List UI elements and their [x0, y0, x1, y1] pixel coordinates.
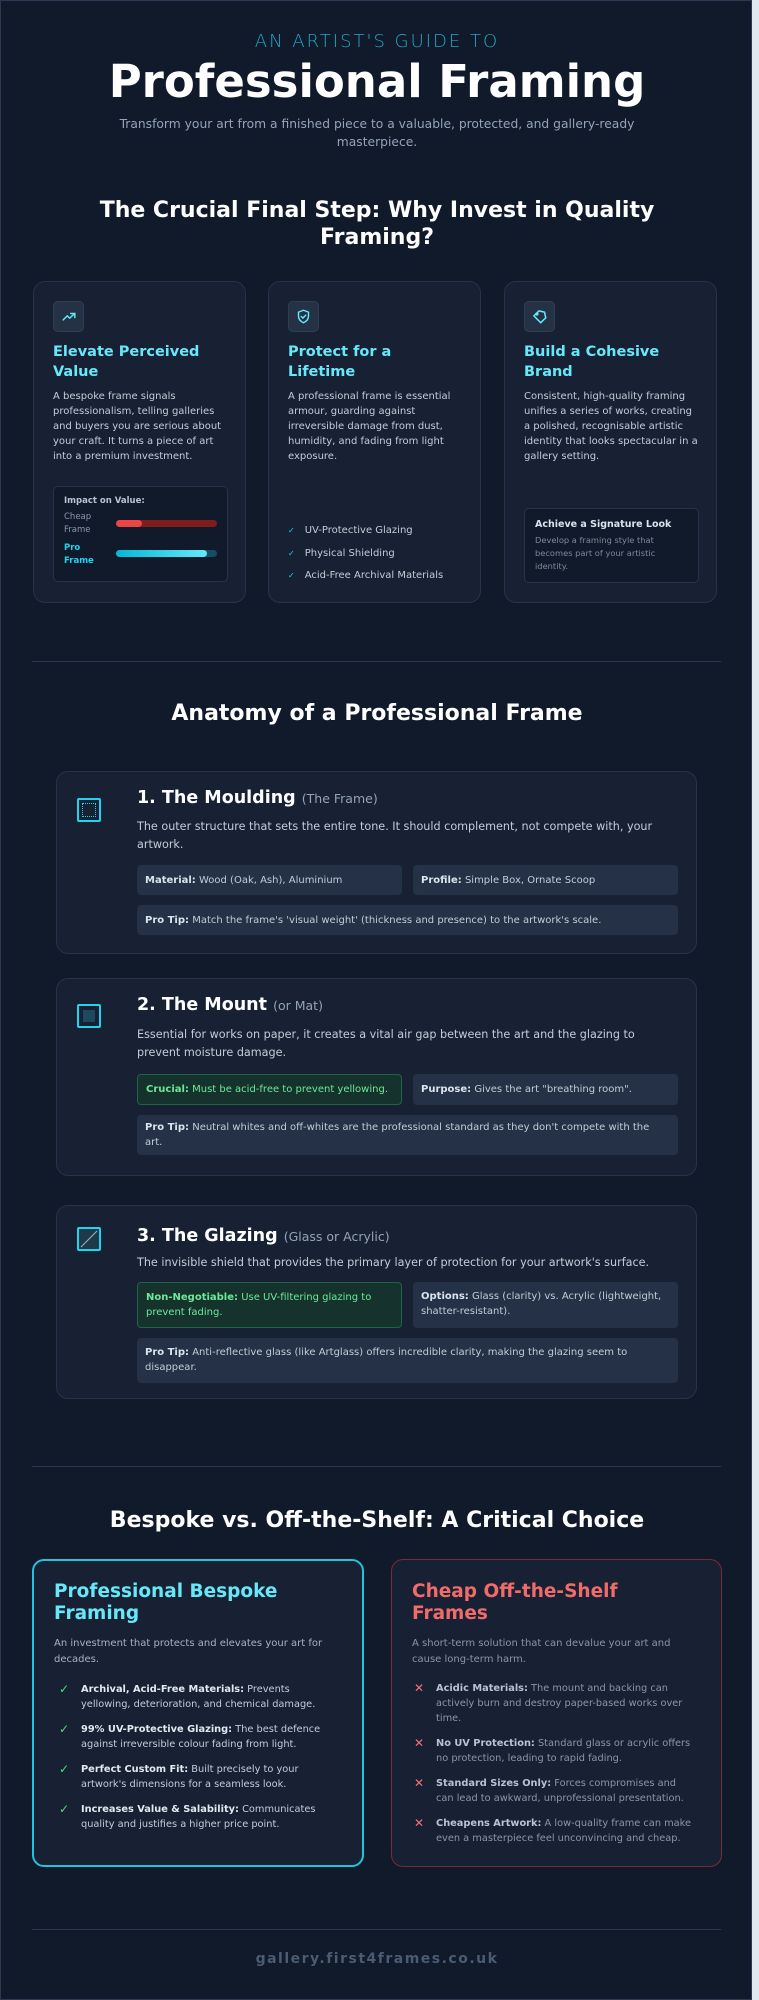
- heading: 3. The Glazing (Glass or Acrylic): [137, 1226, 390, 1246]
- list: drawbacks: ✕: [414, 1736, 424, 1750]
- card heading: Lifetime: [288, 364, 355, 380]
- pill: purpose: Gives the art "breathing room".: [474, 1084, 632, 1095]
- heading: Professional Bespoke: [54, 1581, 277, 1602]
- list: drawbacks: even a masterpiece feel unconvincing and cheap.: [436, 1833, 681, 1844]
- pill: profile: Simple Box, Ornate Scoop: [465, 874, 595, 886]
- card text: your craft. It turns a piece of art: [53, 436, 213, 447]
- list: drawbacks: ✕: [414, 1816, 424, 1830]
- pill: options: [413, 1282, 678, 1328]
- bar chart: impact on value: Impact on Value:: [64, 496, 145, 506]
- card text: [53, 391, 221, 462]
- pill: profile: Profile:: [421, 874, 462, 886]
- intro text: cause long-term harm.: [412, 1654, 526, 1665]
- pill: crucial: Must be acid-free to prevent yellowing.: [192, 1084, 388, 1095]
- list: benefits: artwork's dimensions for a seamless look.: [81, 1779, 286, 1790]
- subtitle: [120, 117, 634, 149]
- text: The invisible shield that provides the primary layer of protection for your artwork's surface.: [137, 1256, 649, 1269]
- heading: bespoke vs off-the-shelf: Bespoke vs. Off-the-Shelf: A Critical Choice: [110, 1508, 644, 1533]
- list: benefits: ✓: [59, 1802, 69, 1816]
- subtitle: Transform your art from a finished piece to a valuable, protected, and gallery-ready: [120, 117, 634, 131]
- card text: identity that looks spectacular in a: [524, 436, 698, 447]
- icon: mount: [77, 1004, 101, 1028]
- heading: Framing: [54, 1603, 139, 1624]
- bar chart: impact on value: [53, 486, 228, 582]
- pill: pro tip: [137, 1338, 678, 1383]
- list: benefits: ✓: [59, 1722, 69, 1736]
- heading: why invest: [100, 198, 654, 250]
- heading: 2. The Mount (or Mat): [137, 995, 323, 1015]
- panel: protect for a lifetime: [268, 281, 481, 603]
- panel: glazing: [56, 1205, 697, 1399]
- pill: non-negotiable: [137, 1282, 402, 1328]
- panel: mount: [56, 978, 697, 1176]
- card heading: Protect for a: [288, 344, 391, 360]
- heading: 1. The Moulding (The Frame): [137, 788, 378, 808]
- card text: [288, 391, 450, 462]
- list: benefits: Perfect Custom Fit: Built precisely to your: [81, 1764, 299, 1775]
- pill: non-negotiable: Non-Negotiable: Use UV-filtering glazing to prevent fading.: [146, 1292, 371, 1318]
- icon: shield: [288, 301, 319, 332]
- card text: [524, 391, 698, 462]
- callout: signature look: [524, 508, 699, 583]
- card heading: [53, 344, 199, 380]
- pill: pro tip: [137, 905, 678, 935]
- callout: signature look: becomes part of your artistic: [535, 548, 655, 558]
- callout: signature look: identity.: [535, 561, 568, 571]
- list: benefits: 99% UV-Protective Glazing: The best defence: [81, 1724, 320, 1735]
- list: benefits: ✓: [59, 1682, 69, 1696]
- list: benefits: against irreversible colour fading from light.: [81, 1739, 297, 1750]
- text: The outer structure that sets the entire tone. It should complement, not compete with, your: [137, 820, 652, 833]
- pill: purpose: [413, 1074, 678, 1105]
- list: drawbacks: Acidic Materials: The mount and backing can: [436, 1683, 668, 1694]
- pill: material: Material:: [145, 874, 196, 886]
- pill: crucial: [137, 1074, 402, 1105]
- checklist: ✓ Physical Shielding: [288, 548, 395, 558]
- heading: why invest: The Crucial Final Step: Why Invest in Quality: [100, 198, 654, 223]
- pill: pro tip: art.: [145, 1137, 162, 1148]
- list: benefits: quality and justifies a higher price point.: [81, 1819, 279, 1830]
- card text: into a premium investment.: [53, 451, 192, 462]
- heading: Cheap Off-the-Shelf: [412, 1581, 618, 1602]
- list: benefits: [59, 1682, 320, 1830]
- pill: pro tip: Pro Tip:: [145, 914, 189, 926]
- card text: professionalism, telling galleries: [53, 406, 214, 417]
- list: drawbacks: Standard Sizes Only: Forces compromises and: [436, 1778, 676, 1789]
- card text: exposure.: [288, 451, 337, 462]
- text: prevent moisture damage.: [137, 1046, 286, 1059]
- list: drawbacks: actively burn and destroy paper-based works over: [436, 1698, 682, 1709]
- icon: glazing: [77, 1227, 101, 1251]
- list: drawbacks: ✕: [414, 1681, 424, 1695]
- bar chart: impact on value: Cheap: [64, 512, 91, 522]
- intro text: [412, 1638, 670, 1665]
- card text: A professional frame is essential: [288, 391, 450, 402]
- card text: A bespoke frame signals: [53, 391, 176, 402]
- intro text: [54, 1638, 322, 1665]
- panel: professional bespoke: [32, 1559, 364, 1867]
- text: [136, 820, 652, 851]
- intro text: decades.: [54, 1654, 99, 1665]
- card text: armour, guarding against: [288, 406, 415, 417]
- list: benefits: Archival, Acid-Free Materials: Prevents: [81, 1684, 290, 1695]
- callout: signature look: Achieve a Signature Look: [535, 519, 671, 530]
- heading: anatomy: Anatomy of a Professional Frame: [171, 701, 583, 726]
- card text: irreversible damage from dust,: [288, 421, 443, 432]
- icon: tag: [524, 301, 555, 332]
- list: drawbacks: [414, 1681, 691, 1844]
- pill: profile: [413, 865, 678, 895]
- checklist: ✓ UV-Protective Glazing: [288, 525, 413, 536]
- list: drawbacks: can lead to awkward, unprofessional presentation.: [436, 1793, 684, 1804]
- pill: crucial: Crucial:: [146, 1084, 189, 1095]
- card heading: [524, 344, 659, 380]
- card text: a polished, recognisable artistic: [524, 421, 683, 432]
- checklist: ✓ Acid-Free Archival Materials: [288, 570, 443, 581]
- panel: elevate perceived value: [33, 281, 246, 603]
- card text: humidity, and fading from light: [288, 436, 444, 447]
- card text: gallery setting.: [524, 451, 599, 462]
- card heading: Elevate Perceived: [53, 344, 199, 360]
- panel: build a cohesive brand: [504, 281, 717, 603]
- intro text: A short-term solution that can devalue your art and: [412, 1638, 670, 1649]
- pill: pro tip: Pro Tip: Neutral whites and off-whites are the professional standard as they don't compete with the: [145, 1122, 649, 1133]
- pill: pro tip: [137, 1115, 678, 1155]
- text: artwork.: [137, 838, 183, 851]
- footer: url: gallery.first4frames.co.uk: [256, 1951, 498, 1967]
- pill: purpose: Purpose:: [421, 1084, 471, 1095]
- icon: trend up: [53, 301, 84, 332]
- checklist: [288, 525, 443, 581]
- icon: moulding: [77, 798, 101, 822]
- bar chart: impact on value: Pro: [64, 543, 80, 553]
- list: benefits: ✓: [59, 1762, 69, 1776]
- intro text: An investment that protects and elevates your art for: [54, 1638, 322, 1649]
- card heading: Value: [53, 364, 98, 380]
- card text: and buyers you are serious about: [53, 421, 221, 432]
- pill: pro tip: Match the frame's 'visual weight' (thickness and presence) to the artwork's scale.: [192, 914, 601, 926]
- pill: material: Wood (Oak, Ash), Aluminium: [199, 874, 342, 886]
- list: drawbacks: ✕: [414, 1776, 424, 1790]
- kicker: AN ARTIST'S GUIDE TO: [255, 31, 499, 52]
- list: drawbacks: No UV Protection: Standard glass or acrylic offers: [436, 1738, 690, 1749]
- heading: Frames: [412, 1603, 488, 1624]
- list: benefits: Increases Value & Salability: Communicates: [81, 1804, 316, 1815]
- pill: pro tip: Pro Tip: Anti-reflective glass (like Artglass) offers incredible clarity, making the glazing seem to disappear.: [145, 1347, 627, 1373]
- card text: unifies a series of works, creating: [524, 406, 692, 417]
- heading: why invest: Framing?: [320, 225, 434, 250]
- title: Professional Framing: [109, 55, 645, 108]
- bar chart: impact on value: Frame: [64, 525, 90, 535]
- card heading: Build a Cohesive: [524, 344, 659, 360]
- text: Essential for works on paper, it creates a vital air gap between the art and the glazing to: [137, 1028, 635, 1041]
- pill: material: [137, 865, 402, 895]
- card heading: [288, 344, 391, 380]
- list: benefits: yellowing, deterioration, and chemical damage.: [81, 1699, 315, 1710]
- card text: Consistent, high-quality framing: [524, 391, 685, 402]
- subtitle: masterpiece.: [337, 135, 417, 149]
- text: [137, 1028, 635, 1059]
- list: drawbacks: no protection, leading to rapid fading.: [436, 1753, 622, 1764]
- heading: [412, 1581, 618, 1624]
- list: drawbacks: time.: [436, 1713, 461, 1724]
- bar chart: impact on value: Frame: [64, 556, 94, 566]
- panel: cheap off-the-shelf: [391, 1559, 722, 1867]
- panel: moulding: [56, 771, 697, 954]
- list: drawbacks: Cheapens Artwork: A low-quality frame can make: [436, 1818, 691, 1829]
- callout: signature look: Develop a framing style that: [535, 535, 654, 545]
- pill: options: Options: Glass (clarity) vs. Acrylic (lightweight, shatter-resistant).: [421, 1291, 661, 1317]
- card heading: Brand: [524, 364, 573, 380]
- heading: [54, 1581, 277, 1624]
